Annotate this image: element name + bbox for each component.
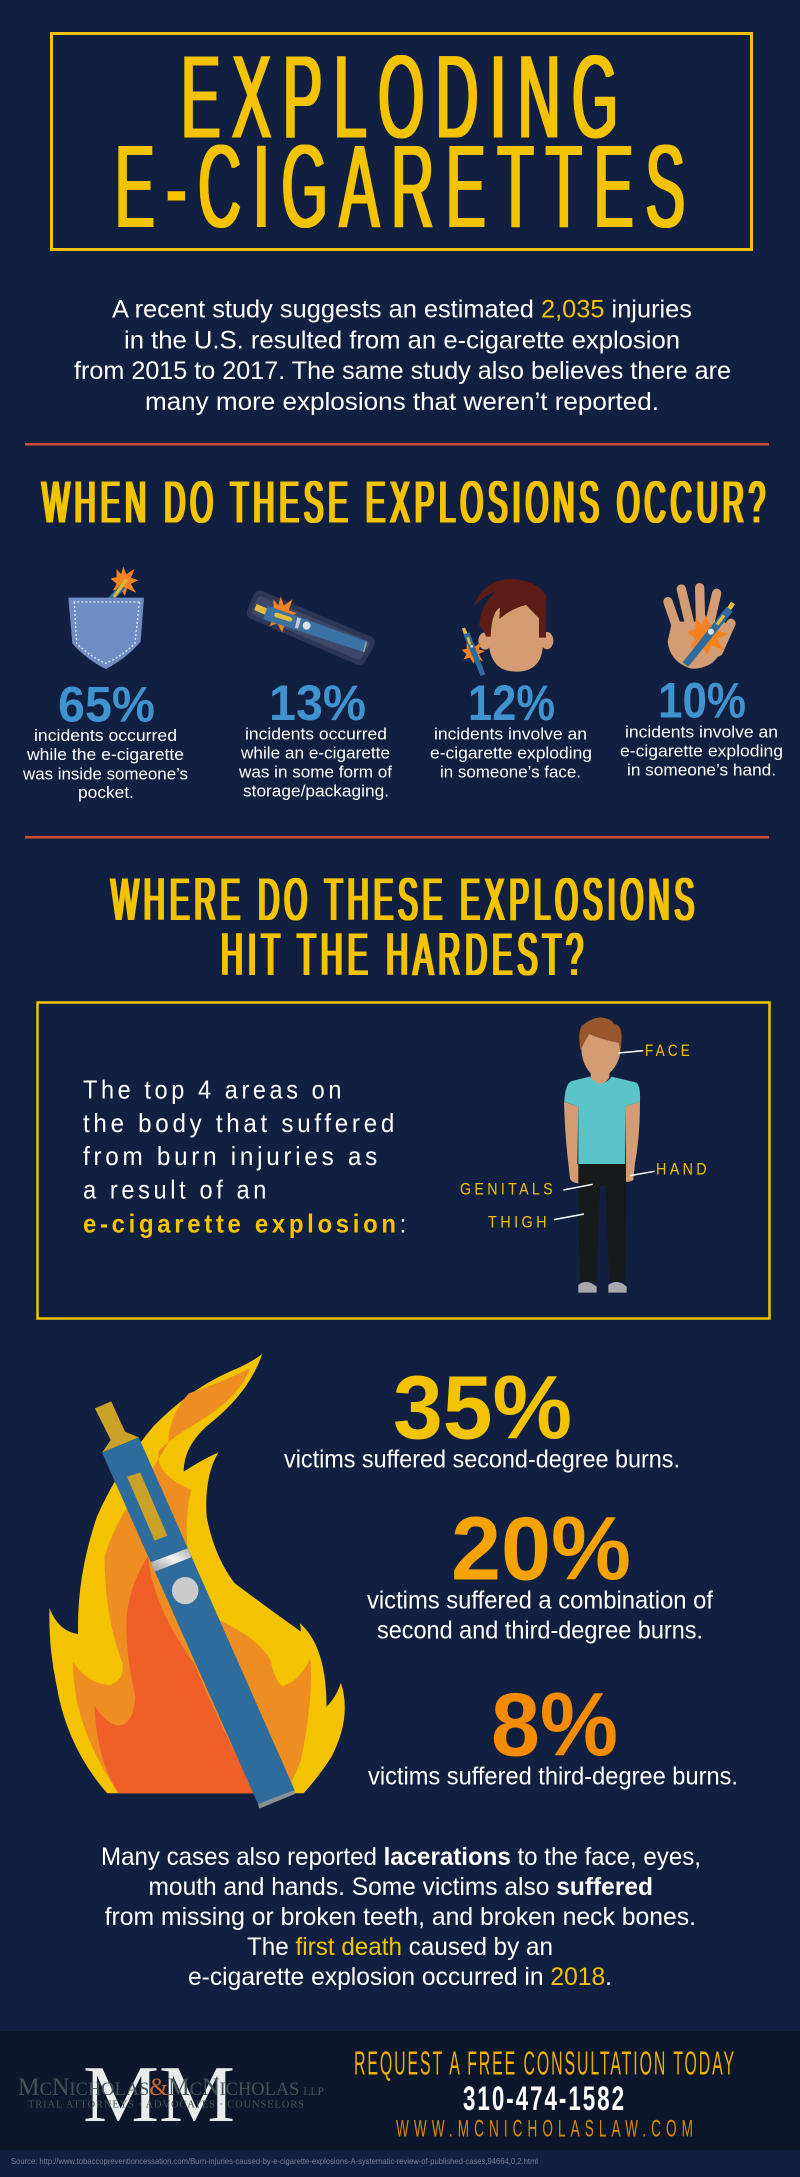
closing paragraph: e-cigarette explosion occurred in 2018. [188, 1963, 612, 1991]
footer band [0, 2031, 800, 2150]
face caption: e-cigarette exploding [430, 744, 592, 762]
panel text [83, 1074, 410, 1238]
stat: pocket 65% [22, 567, 188, 802]
logo: McNicholas & McNicholas [18, 2051, 324, 2139]
panel text: a result of an [83, 1175, 270, 1205]
caption: combination [367, 1586, 713, 1644]
icon: pen in storage case [253, 596, 368, 658]
stat: 20 percent [367, 1499, 713, 1644]
label: genitals: GENITALS [460, 1179, 556, 1198]
illustration: e-cigarette in flames [49, 1354, 345, 1809]
65 percent: 65% [58, 677, 155, 733]
logo: McNicholas & McNicholas: TRIAL ATTORNEYS · ADVOCATES · COUNSELORS [28, 2100, 306, 2111]
stat: face 12% [430, 579, 592, 781]
closing paragraph: Many cases also reported lacerations to the face, eyes, [101, 1843, 701, 1871]
hand caption: e-cigarette exploding [620, 743, 783, 761]
title box [52, 32, 752, 253]
label: hand: HAND [656, 1159, 710, 1178]
intro paragraph: many more explosions that weren’t reported. [145, 388, 659, 416]
panel text: the body that suffered [83, 1108, 398, 1138]
label: thigh: THIGH [488, 1212, 550, 1231]
12 percent: 12% [468, 675, 555, 731]
figure with labels [460, 1017, 710, 1293]
stat: hand 10% [620, 588, 783, 780]
10 percent: 10% [658, 673, 746, 729]
hand caption: incidents involve an [625, 723, 778, 741]
storage caption [238, 725, 392, 801]
pocket caption [22, 727, 188, 802]
closing paragraph [101, 1843, 701, 1991]
hand caption: in someone’s hand. [627, 762, 776, 780]
stat: storage 13% [238, 596, 392, 801]
heading: where do these explosions hit the hardest [111, 866, 699, 988]
closing paragraph: from missing or broken teeth, and broken neck bones. [105, 1903, 696, 1931]
caption: third degree: victims suffered third-degree burns. [368, 1762, 738, 1790]
storage caption: while an e-cigarette [240, 744, 390, 762]
pocket caption: while the e-cigarette [26, 746, 184, 764]
icon: face with exploding pen [462, 579, 553, 676]
icon: standing figure [554, 1017, 655, 1293]
storage caption: was in some form of [238, 763, 392, 781]
panel text: The top 4 areas on [83, 1074, 345, 1104]
label: face: FACE [645, 1041, 693, 1060]
stat: 8 percent: 8% [491, 1676, 618, 1776]
logo: McNicholas & McNicholas: MM [83, 2051, 235, 2139]
pocket caption: pocket. [78, 784, 134, 802]
icon: pocket with exploding pen [68, 567, 144, 669]
stat: 20 percent: 20% [451, 1499, 631, 1599]
intro paragraph [74, 295, 731, 416]
storage caption: storage/packaging. [243, 783, 389, 801]
stat: 35 percent [284, 1358, 680, 1473]
source line: Source: http://www.tobaccopreventioncessation.com/Burn-injuries-caused-by-e-cigarette-explosions-A-systematic-review-of-published-cases,94664,0,2.html [11, 2156, 538, 2166]
face caption: in someone’s face. [440, 763, 581, 781]
closing paragraph: mouth and hands. Some victims also suffered [148, 1873, 653, 1901]
intro paragraph: from 2015 to 2017. The same study also believes there are [74, 357, 731, 385]
stat: 8 percent [368, 1676, 738, 1790]
stat: 35 percent: 35% [393, 1358, 572, 1458]
caption: combination: victims suffered a combination of [367, 1586, 713, 1614]
pocket caption: was inside someone’s [22, 765, 188, 783]
closing paragraph: The first death caused by an [247, 1933, 553, 1961]
intro paragraph: A recent study suggests an estimated 2,035 injuries [112, 295, 692, 323]
caption: second degree: victims suffered second-degree burns. [284, 1445, 680, 1473]
logo: McNicholas & McNicholas: MCNICHOLAS&MCNICHOLAS LLP [18, 2074, 324, 2101]
13 percent: 13% [269, 675, 366, 731]
panel text: from burn injuries as [83, 1141, 381, 1171]
panel text: e-cigarette explosion: [83, 1208, 410, 1238]
hand caption [620, 723, 783, 780]
caption: combination: second and third-degree burns. [377, 1616, 703, 1644]
phone number: 310-474-1582 [463, 2080, 626, 2118]
face caption [430, 725, 592, 781]
panel: top 4 body areas [38, 1002, 770, 1318]
intro paragraph: in the U.S. resulted from an e-cigarette explosion [124, 326, 680, 354]
icon: hand with exploding pen [668, 588, 735, 669]
face caption: incidents involve an [434, 725, 587, 743]
storage caption: incidents occurred [245, 725, 387, 743]
pocket caption: incidents occurred [34, 727, 177, 745]
